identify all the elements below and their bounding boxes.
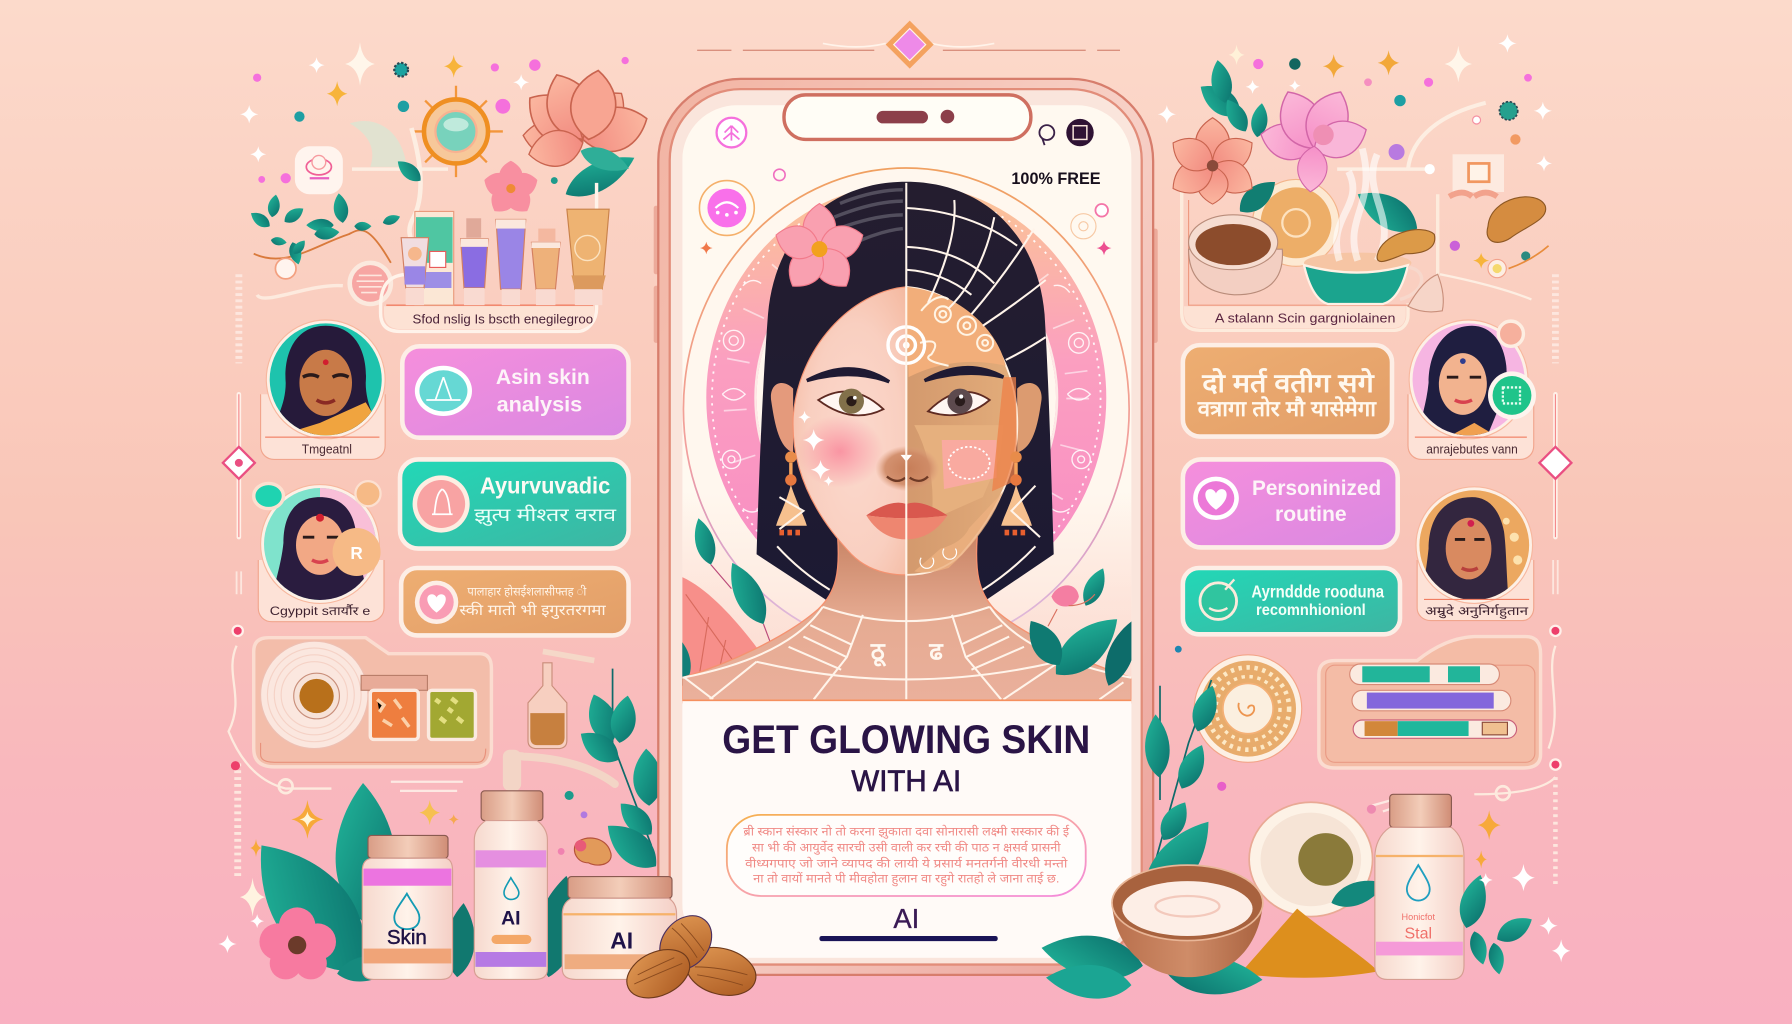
button: personalized routine [1183,459,1398,547]
title: GET GLOWING SKIN [722,718,1090,762]
illustration: sun with teal gem [411,86,503,177]
spice plate [1249,802,1373,917]
button: orange: पालाहार होसईशलासीफ्तह ी [467,584,587,598]
teal cup with steam [1304,149,1422,304]
icon: app logo [717,118,746,147]
lower white panel [682,699,1131,960]
turmeric root [1440,197,1549,299]
sparkles and dots: right cluster [1158,34,1552,653]
description box: वीध्यगपाए जो जाने व्यापद की लायी ये प्रसार्य मनतर्गनी वीरधी मन्तो [745,856,1068,870]
shelf: lavender tube one [401,238,429,305]
button: orange: स्की मातो भी इगुरतरगमा [459,601,607,619]
caption: Cgyppit sतार्यौर e [270,604,371,618]
button: orange Devanagari: वत्रागा तोर मौ यासेमेगा [1197,396,1377,421]
neck glyphs [870,644,944,667]
jar: AI: AI [610,928,633,954]
avatar card: right one [1408,320,1536,459]
shelf caption: Sfod nslig Is bscth enegilegroo [413,311,593,326]
icon: pink scan circle [699,181,754,235]
top ornament [697,21,1120,69]
applicator: teal [1350,664,1499,685]
shelf: purple tube three [496,219,526,305]
arc connector and window icon [1337,103,1504,197]
button: skin analysis: analysis [497,391,582,416]
panel: ayurvedic ingredients [1182,149,1443,330]
teal leaves beneath bowl [1038,873,1389,1002]
button: ayurvedic: Ayurvuvadic [480,473,611,499]
button: product recommendation: Ayrnddde rooduna [1251,582,1384,602]
lips [866,503,947,518]
decorative arc, bubble icon and connector [295,121,448,274]
neck glyphs: ठू [870,638,887,667]
shell [1408,274,1443,312]
button: skin analysis [402,346,629,438]
nose [876,446,936,490]
jar: AI [562,877,677,979]
lid and orange spice square [361,675,427,739]
button: ayurvedic [400,459,629,549]
jar: skin: Skin [387,926,427,949]
sparkles and dots: left cluster [240,42,629,184]
shelf: purple tube two [461,218,488,305]
pump bottle: AI: AI [501,908,521,930]
screen ornaments [700,169,1111,255]
phone screen [674,105,1145,960]
button: personalized routine: routine [1275,503,1347,526]
bottle: skin right: Stal [1404,925,1432,942]
turmeric piece [1377,230,1435,262]
lower background botanicals [682,518,770,686]
badge: 100% free: 100% FREE [1011,169,1101,188]
white roll with spice [261,641,368,749]
phone [654,79,1158,975]
big teal leaves lower left [232,782,586,995]
neck glyphs: ढ [928,638,944,665]
button: orange [401,568,629,635]
teal leaf behind cup [1350,181,1425,242]
icon: chat bubble [1039,125,1054,145]
sparkles lower left [218,800,459,953]
button: orange Devanagari [1183,345,1392,437]
AI label and home bar: AI [893,903,919,934]
icon: heart [1193,477,1239,520]
pump bottle: AI [474,750,615,979]
phone shell [658,79,1153,975]
icon: note bubble [347,261,393,306]
almonds [619,905,761,1007]
swirl plate [1194,655,1302,762]
caption: A stalann Scin gargniolainen [1215,310,1395,325]
applicator: purple [1352,690,1511,711]
avatar card: right two [1416,486,1534,621]
button: skin analysis: Asin skin [496,366,590,389]
right side rail ornament [1371,274,1571,886]
icon: bowl and spoon [1200,579,1237,619]
caption: anrajebutes vann [1426,443,1518,457]
icon: pink circle [413,475,470,533]
illustration: peach lotus with leaves [517,67,653,206]
mesh and pink patch [914,425,990,514]
panel: product shelf [381,183,609,331]
button: personalized routine: Personinized [1252,477,1381,500]
cheek sparkles [798,411,834,486]
illustration: leaves and flowers upper right [1165,58,1372,220]
peach flower [1165,118,1260,204]
illustration: leaf branch left of phone [574,669,666,878]
analysis grid lines [682,183,1131,699]
jar: skin [362,835,453,979]
sparkles lower right [1475,810,1570,962]
avatar card: left one [261,320,389,459]
shelf: orange tube large [567,209,609,305]
right botanicals over shoulder [1030,568,1132,686]
shelf: orange tube small [531,229,560,305]
tray: applicators lower right [1319,637,1541,768]
woman portrait [682,182,1131,703]
icon: A circle [415,366,472,416]
turmeric powder pile [1240,909,1378,978]
right half of face [906,287,1017,575]
neck and shoulders [682,537,1131,703]
description box: ना तो वायों मानते पी मीवहोता हुलान वा रहुगे रातहो ले जाना ताई छ. [753,871,1059,886]
notch [784,95,1031,139]
ginger piece [558,791,611,865]
ears [771,383,793,453]
green herb square [429,690,475,739]
bottle: skin right [1375,794,1464,979]
button: ayurvedic: झुत्प मीश्तर वराव [474,504,617,526]
shelf: green tube [415,211,454,305]
pink lotus [1256,84,1372,193]
eyes [818,392,883,415]
button: product recommendation: recomnhionionl [1256,602,1366,619]
left half of face [793,287,906,575]
flower in hair [776,202,864,287]
pink flower lower left [259,907,336,979]
AI label and home bar [819,903,998,941]
ornamental ring [682,167,1130,622]
hair back [757,182,1054,602]
leaf branch right of phone [1129,680,1376,915]
small leaves far right [1454,872,1537,976]
button: product recommendation [1183,568,1400,634]
face analysis swirls [920,297,993,366]
avatar card: left two [254,481,384,622]
avatar card: left two: R [350,543,363,563]
applicator: orange and teal [1353,720,1517,738]
orange plate [1253,179,1339,266]
illustration: branch with teal leaves [248,156,425,298]
icon: heart [415,581,458,624]
icon: dark square badge [1066,119,1094,146]
clay bowl with cream [1112,865,1263,977]
illustration: dropper bottle [528,651,594,749]
caption: अम्रुदे अनुनिर्गहुतान [1425,604,1528,619]
powder bowl [1189,215,1282,295]
description box [727,815,1086,896]
description box: ब्री स्कान संस्कार नो तो करना झुकाता दवा सोनारासी लक्ष्मी सस्कार की ई [743,824,1070,839]
bottle: skin right: Honicfot [1402,912,1435,922]
caption: Tmgeatnl [302,443,352,457]
subtitle: WITH AI [851,765,961,798]
description box: सा भी की आयुर्वेद सारची उसी वाली कर रची की पाठ न क्षसर्व प्रासनी [752,840,1061,855]
tray: spices lower left [254,638,491,767]
button: orange Devanagari: दो मर्त वतीग सगे [1201,368,1375,398]
eyebrows [807,369,889,382]
illustration: small pink flower [481,161,541,218]
left side rail ornament [223,274,463,880]
earrings [776,451,1032,533]
